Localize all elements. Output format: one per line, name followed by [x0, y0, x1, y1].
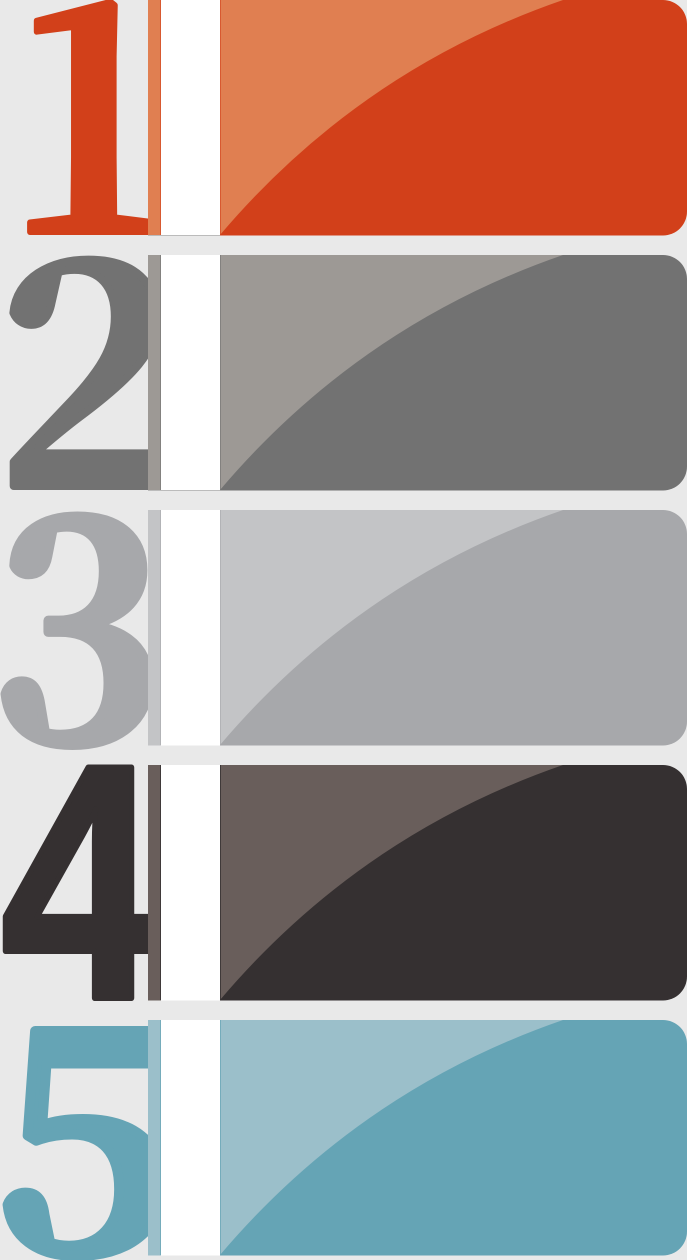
- side strip 1: [148, 0, 161, 236]
- side strip 4: [148, 765, 161, 1000]
- white column 2: [161, 255, 220, 490]
- white column 3: [161, 510, 220, 746]
- numbered row 2: [0, 128, 687, 575]
- panel 2: [220, 255, 687, 490]
- panel 1: [220, 0, 687, 236]
- numbered row 3: [0, 386, 687, 828]
- numeral 4: 4: [1, 695, 161, 1069]
- numbered row 1: [5, 0, 687, 324]
- side strip 5: [148, 1020, 161, 1256]
- panel 5: [220, 1020, 687, 1256]
- numbered row 4: [1, 695, 687, 1069]
- side strip 2: [148, 255, 161, 490]
- white column 1: [161, 0, 220, 236]
- numeral 2: 2: [0, 128, 179, 575]
- panel 4: [220, 765, 687, 1000]
- white column 5: [161, 1020, 220, 1256]
- side strip 3: [148, 510, 161, 746]
- white column 4: [161, 765, 220, 1000]
- panel 3: [220, 510, 687, 746]
- numbered row 5: [0, 896, 687, 1260]
